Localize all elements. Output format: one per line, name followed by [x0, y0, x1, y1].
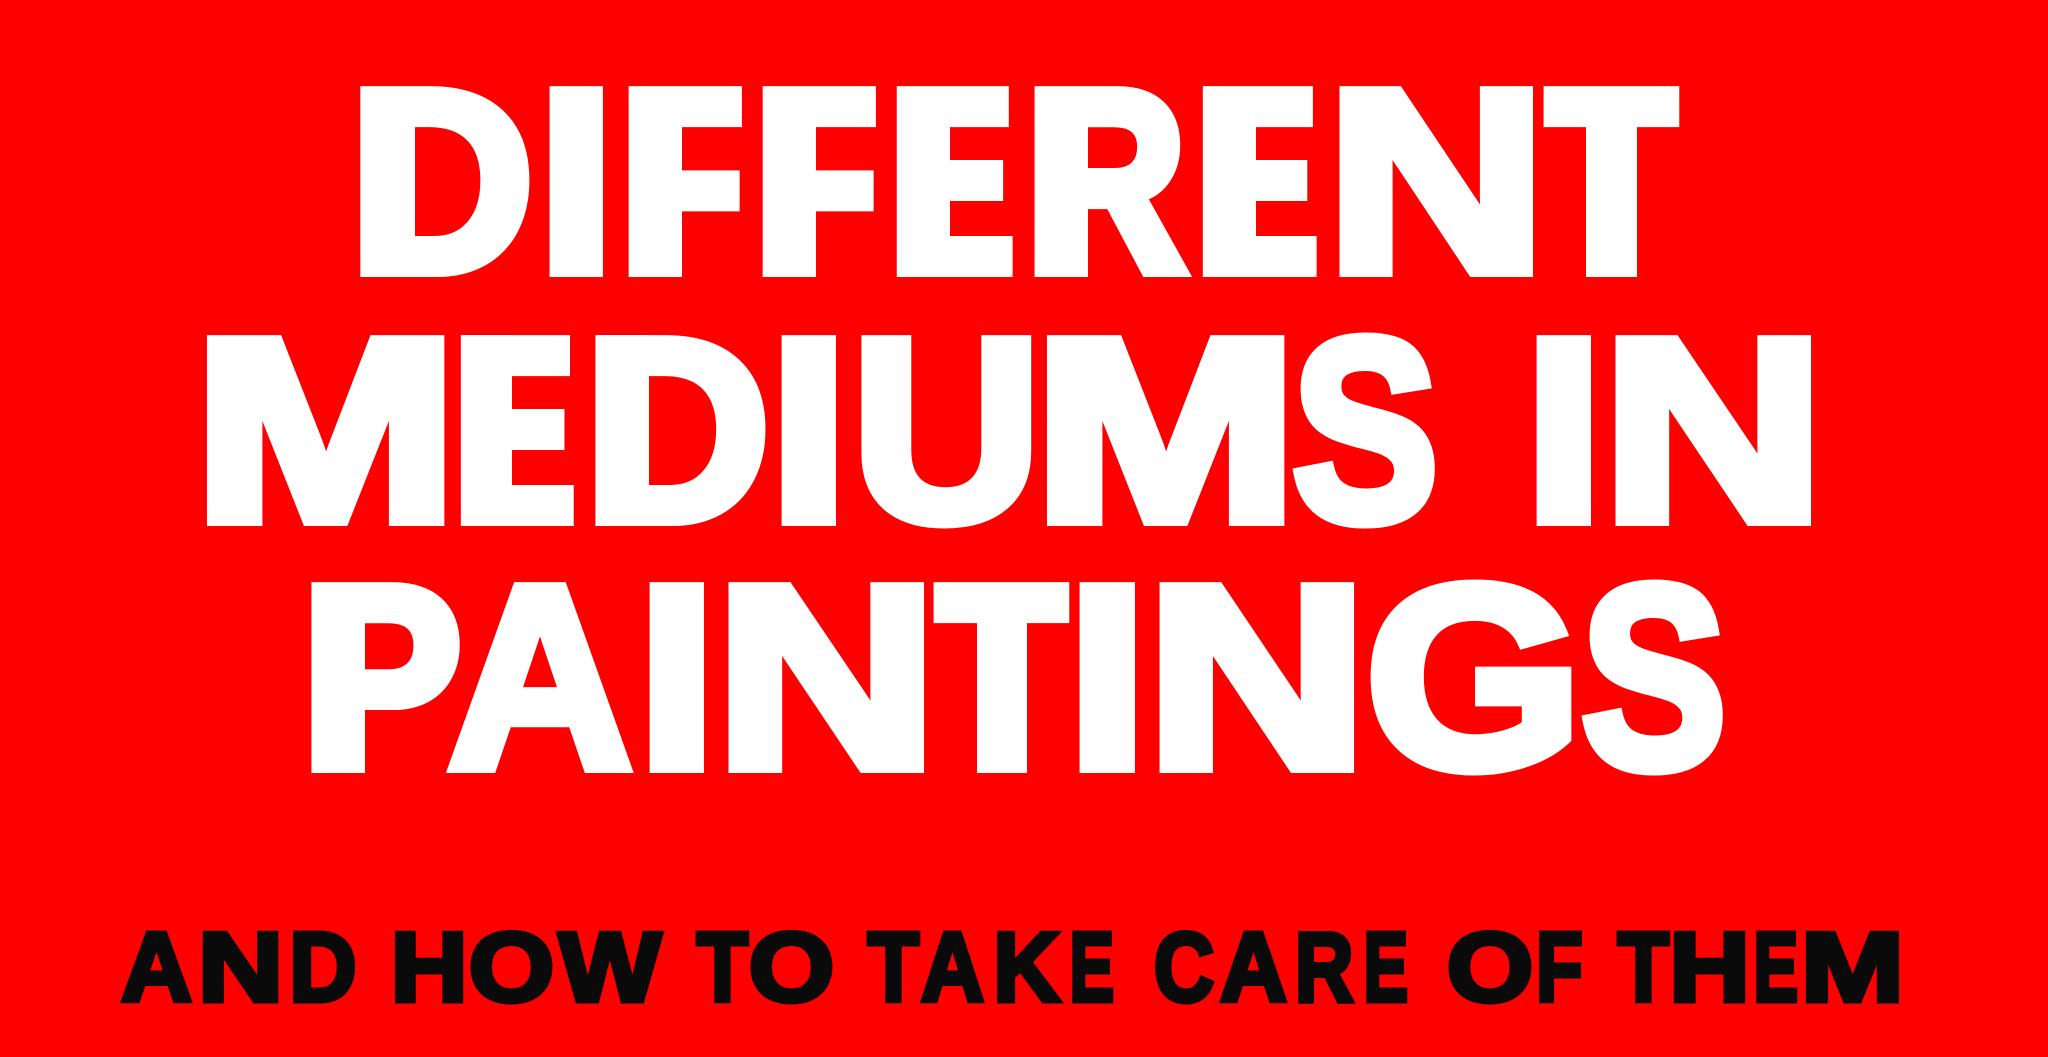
subtitle: O: [749, 913, 834, 1023]
title line: PAINTINGS: N: [1146, 533, 1368, 823]
title line: DIFFERENT: T: [1546, 37, 1677, 327]
title line: MEDIUMS IN: S: [1292, 284, 1438, 575]
subtitle: T: [868, 913, 919, 1022]
title line: DIFFERENT: D: [349, 35, 534, 326]
subtitle: A: [121, 912, 192, 1022]
title line: PAINTINGS: G: [1366, 532, 1582, 823]
subtitle: W: [559, 912, 662, 1022]
title: [193, 35, 1825, 823]
title line: MEDIUMS IN: D: [584, 285, 770, 575]
subtitle: D: [289, 913, 357, 1022]
title line: DIFFERENT: N: [1326, 36, 1547, 327]
title line: MEDIUMS IN: I: [1524, 285, 1603, 575]
subtitle: F: [1536, 912, 1583, 1022]
title line: DIFFERENT: F: [754, 35, 879, 327]
subtitle: C: [1154, 913, 1214, 1022]
title line: PAINTINGS: [301, 532, 1726, 823]
title line: PAINTINGS: S: [1581, 532, 1726, 822]
title line: MEDIUMS IN: [193, 284, 1825, 576]
subtitle: E: [1070, 912, 1114, 1022]
title line: MEDIUMS IN: E: [453, 284, 577, 575]
subtitle: A: [921, 913, 984, 1022]
title line: DIFFERENT: E: [888, 37, 1016, 327]
title line: MEDIUMS IN: M: [1033, 285, 1298, 575]
subtitle: H: [1669, 913, 1750, 1022]
title line: DIFFERENT: F: [620, 35, 745, 327]
subtitle: M: [1801, 913, 1904, 1022]
title line: MEDIUMS IN: U: [852, 286, 1041, 576]
title line: DIFFERENT: [349, 35, 1677, 327]
title line: PAINTINGS: P: [301, 532, 462, 823]
title line: MEDIUMS IN: I: [769, 285, 848, 575]
title line: PAINTINGS: I: [637, 532, 716, 822]
subtitle: E: [1364, 912, 1408, 1022]
title line: DIFFERENT: E: [1195, 37, 1320, 327]
subtitle: O: [469, 913, 554, 1023]
subtitle: H: [390, 912, 468, 1022]
title line: DIFFERENT: I: [537, 36, 615, 327]
title line: MEDIUMS IN: M: [193, 285, 458, 575]
subtitle: T: [1618, 913, 1669, 1022]
subtitle: T: [697, 913, 748, 1022]
subtitle: O: [1447, 913, 1533, 1022]
subtitle: R: [1295, 913, 1354, 1023]
title line: PAINTINGS: N: [715, 533, 938, 823]
title line: PAINTINGS: A: [448, 532, 632, 823]
title line: PAINTINGS: T: [936, 533, 1067, 823]
title line: DIFFERENT: R: [1025, 36, 1187, 327]
subtitle: E: [1754, 912, 1798, 1022]
title line: PAINTINGS: I: [1067, 532, 1148, 823]
subtitle: [121, 912, 1904, 1023]
title line: MEDIUMS IN: N: [1602, 286, 1825, 576]
subtitle: A: [1220, 914, 1287, 1023]
subtitle: K: [993, 914, 1060, 1023]
subtitle: N: [198, 913, 283, 1023]
